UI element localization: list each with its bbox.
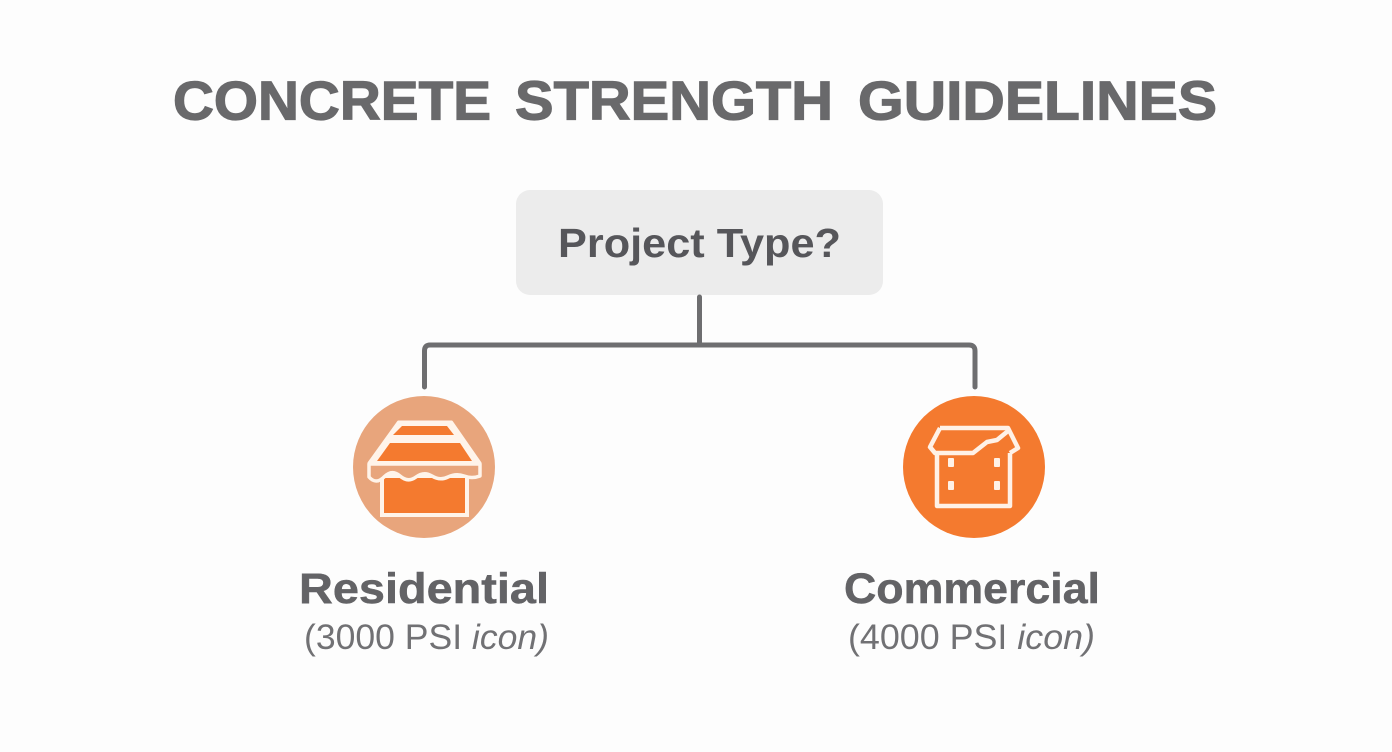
- icon: residential house: [353, 396, 495, 538]
- label: residential: [299, 565, 549, 657]
- title: STRENGTH: [515, 70, 833, 132]
- tree connector: [424, 297, 975, 387]
- title: GUIDELINES: [858, 70, 1217, 132]
- label: commercial: (4000 PSI icon): [848, 618, 1095, 657]
- label: commercial: Commercial: [844, 565, 1100, 613]
- title: [173, 70, 1217, 132]
- decision box: project type: [516, 190, 883, 295]
- decision box: project type: Project Type?: [558, 220, 841, 266]
- label: residential: Residential: [299, 565, 549, 613]
- label: commercial: [844, 565, 1100, 657]
- title: CONCRETE: [173, 70, 491, 132]
- icon: commercial building: [903, 396, 1045, 538]
- label: residential: (3000 PSI icon): [304, 618, 549, 657]
